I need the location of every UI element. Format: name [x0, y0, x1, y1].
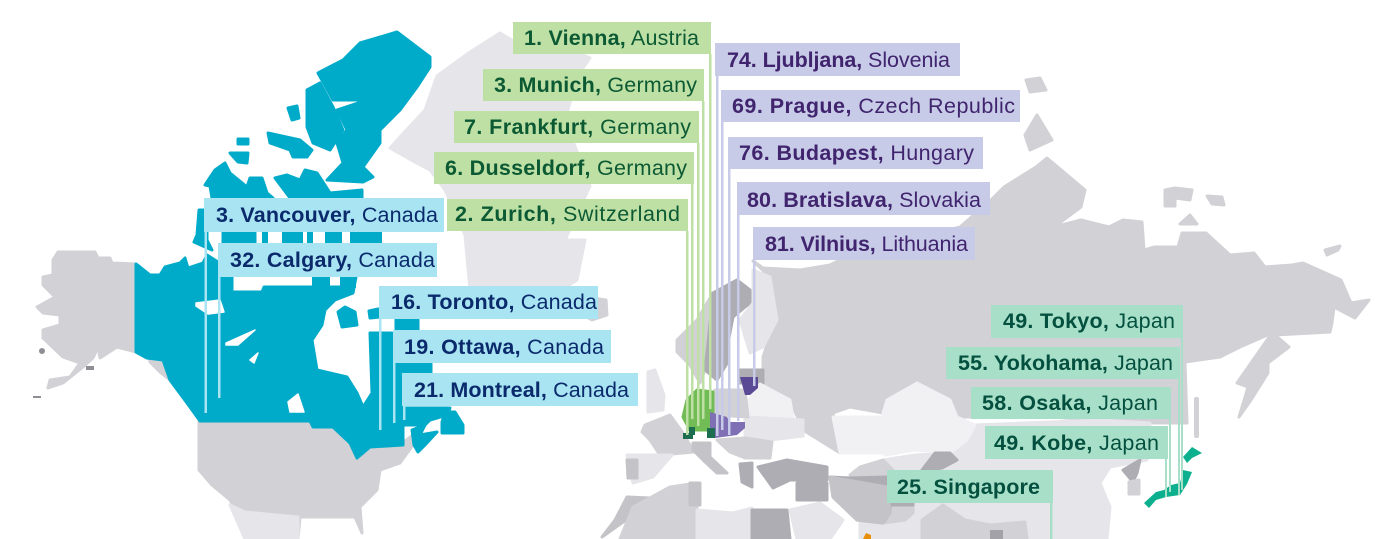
label: Vancouver	[204, 198, 444, 232]
label: Yokohama	[946, 347, 1180, 379]
label: Budapest	[728, 137, 983, 169]
map: China	[860, 420, 1150, 539]
map: Canada	[136, 32, 463, 458]
map: Sakhalin	[1194, 397, 1199, 438]
label: Ottawa: 19. Ottawa, Canada	[404, 335, 604, 359]
connectors: Japan and Singapore	[1050, 338, 1183, 539]
map: Canadian lakes	[196, 300, 304, 412]
connectors: green European cities	[686, 54, 712, 435]
map: Russia and northern Asia	[753, 158, 1369, 453]
label: Dusseldorf: 6. Dusseldorf, Germany	[445, 156, 687, 180]
label: Frankfurt: 7. Frankfurt, Germany	[464, 115, 691, 139]
label: Toronto: 16. Toronto, Canada	[391, 290, 597, 314]
map: Mongolia and Kazakhstan	[833, 383, 975, 455]
label: Bratislava	[737, 182, 990, 215]
map: Arabian Peninsula	[790, 503, 843, 539]
label: Ljubljana	[715, 43, 960, 76]
label: Singapore	[887, 470, 1053, 503]
map: Baltics and Belarus	[740, 370, 803, 440]
map: United States	[199, 421, 413, 539]
label: Budapest: 76. Budapest, Hungary	[739, 141, 974, 165]
connectors: purple European cities	[716, 76, 756, 436]
map: Scandinavia and Finland	[677, 270, 777, 383]
label: Vienna: 1. Vienna, Austria	[524, 26, 699, 50]
label: Tokyo: 49. Tokyo, Japan	[1003, 309, 1175, 333]
label: Yokohama: 55. Yokohama, Japan	[958, 351, 1173, 375]
map: Poland	[715, 390, 748, 417]
map: Canada arctic islands	[194, 32, 463, 452]
map: highlighted Japan	[1144, 447, 1202, 508]
map: Iran	[830, 477, 890, 523]
label: Montreal: 21. Montreal, Canada	[414, 378, 629, 402]
map: Iceland	[585, 298, 607, 320]
label: Frankfurt	[454, 111, 699, 143]
map: Central and South Asia	[830, 460, 1027, 539]
connectors: Canada cities	[204, 232, 406, 430]
label: Vienna	[513, 22, 711, 54]
label: Munich	[483, 69, 704, 101]
label: Kobe: 49. Kobe, Japan	[994, 431, 1159, 455]
map: Russian arctic islands	[1025, 78, 1340, 255]
label: Toronto	[379, 286, 598, 319]
label: Osaka: 58. Osaka, Japan	[982, 391, 1158, 415]
label: Prague: 69. Prague, Czech Republic	[732, 94, 1015, 118]
label: Calgary	[218, 243, 437, 277]
map: highlighted Germany, Austria, Switzerland	[683, 390, 723, 439]
map: North Africa	[602, 483, 790, 539]
label: Tokyo	[991, 305, 1183, 338]
map: UK and Ireland	[648, 370, 664, 412]
map: France	[642, 415, 694, 455]
label: Ottawa	[393, 330, 611, 363]
label: Osaka	[971, 387, 1171, 419]
label: Montreal	[402, 373, 638, 406]
map: Turkey and Syria	[758, 460, 827, 500]
map: highlighted Central Europe and Lithuania	[710, 377, 758, 438]
map: Nepal and Korea	[922, 453, 1140, 494]
label: Ljubljana: 74. Ljubljana, Slovenia	[727, 48, 950, 72]
map: Greenland	[390, 33, 590, 316]
map: highlighted Singapore marker	[863, 533, 871, 539]
label: Munich: 3. Munich, Germany	[494, 73, 697, 97]
map: Alaska	[33, 252, 170, 398]
map: Spain and Portugal	[627, 455, 672, 483]
label: Vilnius: 81. Vilnius, Lithuania	[765, 232, 968, 256]
map: Italy and Balkans	[693, 438, 772, 487]
label: Calgary: 32. Calgary, Canada	[230, 248, 435, 272]
label: Kobe	[985, 426, 1168, 459]
label: Dusseldorf	[434, 152, 694, 184]
label: Zurich: 2. Zurich, Switzerland	[455, 202, 680, 226]
map: Mexico	[230, 505, 298, 539]
label: Bratislava: 80. Bratislava, Slovakia	[747, 188, 981, 212]
label: Singapore: 25. Singapore	[897, 475, 1040, 499]
label: Vilnius	[753, 227, 975, 260]
label: Vancouver: 3. Vancouver, Canada	[216, 203, 438, 227]
